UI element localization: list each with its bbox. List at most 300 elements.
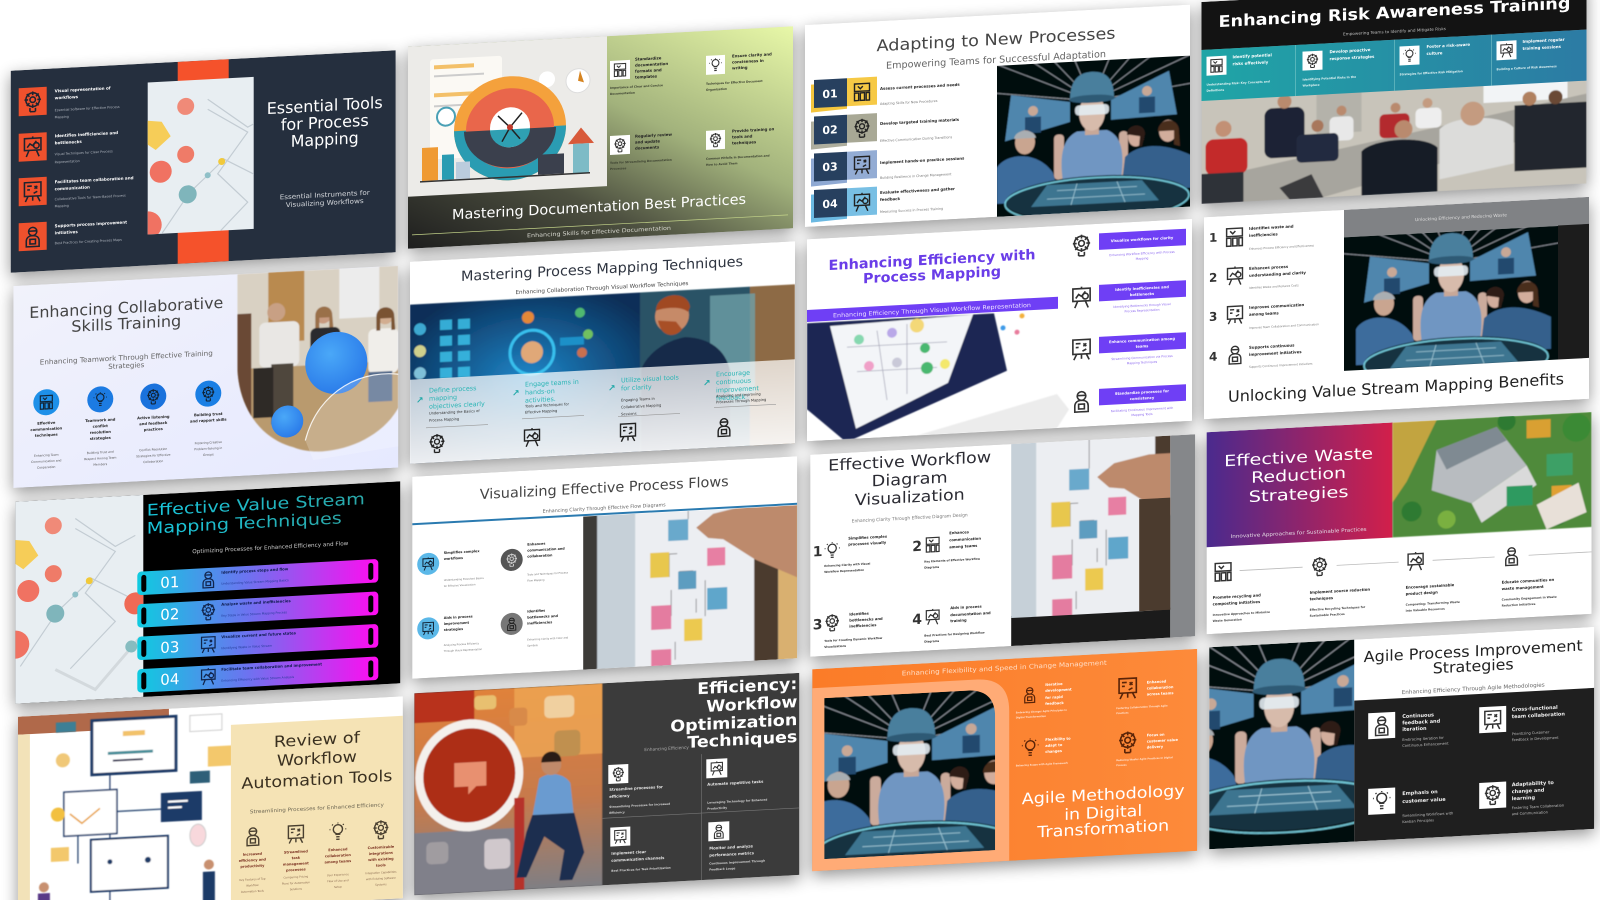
benefit labels: Enhance communication among [1109,337,1175,344]
step labels: Develop targeted training materials [880,117,960,126]
strategy labels [1402,704,1565,808]
risk labels: culture [1426,50,1443,56]
skill notes: Communication and [31,458,62,464]
benefit notes: Supports Continuous Improvement Initiatives [1249,362,1313,369]
subtitle: Enhancing Clarity Through Effective Flow Diagrams [543,502,666,515]
item notes: Tools for Creating Dynamic Workflow [824,636,883,643]
strategy notes: Feedback in Development [1512,736,1559,742]
arrows and icons [416,375,776,454]
item descriptions: Essential Software for Effective Process [55,105,120,112]
title: Agile Methodology [1022,782,1185,808]
feature notes: Plans for Automation [282,880,310,886]
task labels: Automate repetitive tasks [707,779,764,787]
benefit notes: Enhances Process Efficiency and Effectiveness [1249,243,1315,251]
process map image [148,76,254,234]
skill labels: communication [30,426,63,432]
practice labels: Ensure clarity and [732,51,772,59]
step notes: Analyzing and Improving [716,392,761,398]
task notes: Best Practices for Task Prioritization [611,866,671,873]
beige title panel [231,716,403,900]
step labels: Assess current processes and needs [880,82,960,91]
step labels: Facilitate team collaboration and improvement [221,661,322,672]
flow labels: inefficiencies [527,620,552,626]
item numbers: 2 [912,539,922,555]
panel: Effective Waste Reduction Strategies [1207,408,1592,634]
subtitle: Streamlining Processes for Enhanced Efficiency [250,802,384,815]
strategy notes: Sustainable Practices [1310,612,1345,618]
sticky notes photo [1011,436,1170,618]
item numbers [813,539,922,634]
benefit numbers [1209,231,1217,364]
title [1224,444,1373,507]
risk labels: risks effectively [1232,59,1269,66]
title [1364,637,1583,681]
strategy labels: learning [1512,795,1535,802]
title: Visualization [855,486,965,509]
practice notes: How to Avoid Them [706,161,738,167]
risk notes: Building a Culture of Risk Awareness [1496,64,1557,71]
subtitle: Optimizing Processes for Enhanced Efficiency and Flow [192,541,349,555]
title: Workflow [277,748,357,770]
practice notes: Organization [706,87,727,92]
benefit labels: Visualize workflows for clarity [1111,236,1174,243]
strategy notes: Fostering Team Collaboration [1512,803,1564,810]
feature labels: processes [286,867,306,872]
strategy labels: product design [1406,590,1438,596]
benefit labels: Identify inefficiencies and [1115,285,1169,292]
step notes: Identifying Waste in Value Stream [221,644,272,650]
skill labels: Teamwork and [85,418,116,423]
feature labels: integrations [369,851,393,856]
agile labels: adapt to [1045,743,1063,748]
item labels: Supports process improvement [55,220,127,228]
step notes: Effective Mapping [525,409,557,415]
task labels: Implement clear [611,849,646,856]
benefit labels [1249,223,1306,357]
strategy notes [1402,729,1564,824]
strategy notes: and Communication [1512,810,1548,816]
item labels: bottlenecks [55,139,82,145]
benefit notes: Enhancing Workflow Efficiency with Process [1109,250,1175,257]
practice notes: Techniques for Effective Document [706,79,763,86]
risk labels [1232,37,1565,66]
step notes: Measuring Success in Process Training [880,207,943,214]
title: Strategies [1249,483,1349,506]
panel: Agile Methodology in Digital Transformation [764,649,1197,900]
risk notes: Strategies for Effective Risk Mitigation [1400,69,1463,77]
panel: Mastering Process Mapping Techniques [410,241,795,464]
numbered badges: 04 [822,197,838,211]
agile labels: development [1045,688,1072,693]
subtitle: Strategies [108,361,145,371]
step headings: Encourage [716,369,750,378]
benefit numbers: 3 [1209,310,1217,324]
practice labels: conciseness in [732,58,764,65]
numbered badges: 02 [822,123,838,137]
flow labels: workflows [444,556,463,561]
item numbers: 1 [813,544,822,561]
title: Enhancing Efficiency with [829,247,1035,274]
title: Efficiency: [697,674,797,698]
arrows and icons: ↗ [608,384,616,394]
item labels: processes visually [848,541,887,547]
item labels [55,84,134,235]
step headings: improvement [716,384,759,394]
agile labels: feedback [1045,701,1064,706]
purple subtitle band: Enhancing Efficiency Through Visual Workflow Representation [833,303,1031,319]
step notes: Understanding the Basics of [429,409,480,416]
task labels: Streamline processes for [609,784,663,792]
skill labels: Effective [37,421,56,426]
task notes [609,797,767,877]
arrows and icons: ↗ [703,379,711,389]
title [828,247,1036,289]
subtitle: Innovative Approaches for Sustainable Practices [1231,527,1367,540]
icons column [19,87,47,251]
teal band [1202,30,1586,101]
strategy labels: change and [1512,788,1545,795]
item descriptions: Visual Techniques for Clear Process [55,149,113,156]
skill notes: Conflict Resolution [139,447,167,452]
feature notes: Integration Capabilities [365,870,397,875]
item labels: documentation and [950,611,991,617]
agile notes: Reducing Waste: Agile Practices in Digital [1116,756,1173,762]
benefit notes: Mapping Techniques [1127,360,1158,365]
step notes: Sessions [621,412,637,417]
benefit labels: inefficiencies [1249,231,1278,238]
practice labels: Provide training on [732,126,774,134]
item labels: training [950,618,967,623]
title [268,96,382,149]
benefit labels: Standardize processes for [1115,389,1169,396]
skill labels: and feedback [139,421,168,426]
skill labels: Building trust [194,412,223,417]
subtitle: Enhancing Flexibility and Speed in Change Management [902,659,1107,678]
risk labels: response strategies [1330,54,1375,61]
title [241,727,392,793]
strategy notes: Embracing Iteration for [1402,736,1444,742]
title: Optimization [670,710,797,736]
subtitle: Enhancing Skills for Effective Documentation [527,226,672,239]
step headings: continuous [716,377,752,386]
title: in Digital [1064,802,1142,824]
subtitle: Enhancing Teamwork Through Effective Training [40,349,213,367]
practice labels: Standardize [635,55,662,62]
flow notes: Symbols [527,643,539,648]
futuristic team image [1209,640,1354,850]
flow labels: Identifies [527,609,545,614]
futuristic team image [1344,226,1558,371]
benefit notes [1249,243,1319,369]
practice labels: techniques [732,139,757,146]
step headings [429,368,759,418]
strategy notes: Effective Recycling Techniques for [1310,605,1366,612]
item descriptions: Mapping [55,115,69,119]
step bars: 03 [160,638,179,657]
item icons [825,537,939,631]
futuristic team image [764,660,1080,900]
title: Essential Tools [267,93,383,118]
item labels: communication [55,184,90,191]
risk notes: Workplace [1302,83,1320,88]
strategy labels: waste management [1502,584,1544,591]
step notes: Building Resilience in Change Management [880,172,952,180]
strategy labels: Emphasis on [1402,789,1438,797]
title: Effective Workflow [828,448,992,475]
mosaic and reader image [414,683,602,895]
benefit numbers: 2 [1209,271,1217,285]
title: Mastering Process Mapping Techniques [461,254,743,285]
strategy notes: Reduction Initiatives [1502,602,1536,608]
skill notes: Members [93,462,108,467]
panel: Enhancing Risk Awareness Training [1202,0,1586,204]
skill notes: Groups [203,452,214,457]
benefit notes: Mapping [1136,256,1149,261]
benefit notes: Facilitating Continuous Improvement with [1111,406,1173,413]
risk notes: Understanding Risk: Key Concepts and [1206,79,1270,87]
numbered badges [811,77,877,223]
strategy labels: Implement source reduction [1310,587,1370,595]
feature labels: tools [376,863,386,868]
item descriptions: Collaborative Tools for Team-Based Process [55,194,126,201]
agile labels: changes [1045,749,1062,754]
step labels: Identify process steps and flow [221,566,289,575]
item labels: bottlenecks and [849,617,883,623]
task icons [602,749,799,885]
title: Automation Tools [241,767,392,793]
panel: Essential Tools for Process Mapping [10,50,396,273]
risk labels: Identify potential [1232,52,1272,59]
flow notes: Analyzing Process Efficiency [444,641,479,647]
subtitle [280,190,370,207]
benefit labels: Enhances process [1249,264,1289,271]
skill labels: and rapport skills [190,418,227,424]
step notes: Understanding Value Stream Mapping Basics [221,578,289,586]
skill notes: Building Trust and [87,450,114,455]
round icons [417,548,523,640]
item notes: Visualizations [824,644,846,649]
step labels: Analyze waste and inefficiencies [221,598,291,607]
title: Mapping Techniques [147,508,342,538]
feature notes: Automation Tools [241,889,265,894]
strategy notes: Continuous Enhancement [1402,742,1449,748]
step labels: Evaluate effectiveness and gather [880,186,955,195]
subtitle: Enhancing Collaboration Through Visual Workflow Techniques [516,281,689,296]
skill notes: Fostering Creative [195,440,222,445]
step notes: Adapting Skills for New Procedures [880,99,938,106]
task notes: Feedback Loops [709,866,736,872]
practice labels: formats and [635,67,662,74]
skill notes: Collaboration [143,459,163,464]
benefit labels: Identifies waste and [1249,224,1294,231]
step notes [221,578,294,683]
title: Effective Waste [1224,444,1373,470]
feature labels: efficiency and [239,858,267,863]
title: Agile Process Improvement [1364,637,1583,666]
benefit notes [1109,250,1175,418]
skill notes: Cooperation [37,465,56,470]
step notes: Effective Communication During Transitions [880,135,952,143]
agile labels: Iterative [1045,682,1063,687]
group training photo [236,266,398,452]
arrows and icons: ↗ [416,396,424,406]
agile labels: Enhanced [1147,680,1167,685]
practice labels [635,49,774,151]
flow labels: bottlenecks and [527,614,559,620]
agile labels: Focus on [1147,733,1165,738]
agile labels: customer value [1147,738,1178,744]
flow labels: collaboration [527,553,553,559]
translucent overlay [410,359,795,464]
item labels: Enhances [949,530,970,535]
task labels: performance metrics [709,850,755,858]
feature notes: Solutions [290,887,303,891]
panel: Effective Value Stream Mapping Techniques [1,471,400,722]
item numbers: 3 [813,617,822,634]
strategy notes: Community Engagement in Waste [1502,595,1557,602]
task notes: Streamlining Processes for Increased [609,802,670,809]
step labels [221,564,322,672]
item labels: inefficiencies [849,623,877,629]
strategy labels: Educate communities on [1502,577,1554,585]
item labels: Identifies inefficiencies and [55,130,118,138]
strategy notes: Innovative Approaches to Minimize [1213,610,1270,617]
agile notes: Fostering Collaboration Through Agile [1116,704,1168,710]
feature labels: Increased [243,852,263,857]
agile notes: Embracing Change: Agile Principles in [1016,709,1067,715]
skill labels: practices [144,427,164,432]
title [30,297,222,332]
strategy labels: techniques [1310,595,1334,601]
item descriptions: Representation [55,159,80,164]
step notes [429,391,766,427]
title: Visualizing Effective Process Flows [480,474,729,503]
flow notes: Enhancing Clarity with Color and [527,635,569,642]
item labels: Identifies [849,612,870,617]
agile labels: Flexibility to [1045,737,1071,742]
strategy labels: composting initiatives [1213,599,1261,606]
title: Effective Value Stream [147,489,365,520]
feature labels: management [283,861,309,867]
subtitle: Enhancing Efficiency [644,745,689,753]
practice labels: documents [635,144,660,151]
practice labels: templates [635,73,658,80]
automation illustration [38,713,232,900]
strategy icons [1368,706,1506,815]
strategy labels: Continuous [1402,712,1434,720]
step notes: Key Steps in Value Stream Mapping Process [221,610,287,618]
skill labels [30,412,226,440]
title: Reduction [1251,464,1346,487]
title: Adapting to New Processes [877,24,1115,55]
task notes: Leveraging Technology for Enhanced [707,798,767,805]
step headings: mapping [429,393,457,403]
panel: Unlocking Value Stream Mapping Benefits [1204,189,1600,425]
item notes: Key Elements of Effective Workflow [924,557,980,564]
dashboard and analyst image [410,284,795,464]
risk icons [1206,33,1516,101]
benefit notes: Identifies Waste and Reduces Costs [1249,283,1299,290]
step labels [880,82,965,202]
flow notes: Tools and Techniques for Process [527,570,569,577]
skill labels: conflict [93,424,108,429]
benefit notes: Process Representation [1124,308,1160,313]
timeline icons [1215,543,1592,581]
risk notes: Definitions [1206,88,1224,93]
benefit notes: Improves Team Collaboration and Communication [1249,322,1319,330]
benefit notes: Mapping Tools [1131,412,1153,417]
title [828,448,992,511]
strategy notes: Kanban Principles [1402,818,1434,824]
title [670,674,798,753]
item notes: Enhancing Clarity with Visual [824,562,870,568]
flow labels: strategies [444,627,463,632]
risk labels: training sessions [1522,44,1562,51]
title: Strategies [1433,655,1514,677]
item labels: Facilitates team collaboration and [55,175,134,184]
numbered badges: 01 [822,87,838,101]
benefit labels: Supports continuous [1249,342,1295,350]
strategy notes: into Valuable Resources [1406,607,1445,613]
flow labels: Enhances [527,542,545,547]
practice notes: Processes [610,166,627,171]
strategy labels: feedback and [1402,719,1441,727]
item notes: Best Practices for Designing Workflow [924,630,985,638]
strategy notes: Streamlining Workflows with [1402,811,1453,818]
isometric waste facility image [1393,408,1592,537]
practice labels: and update [635,138,660,145]
skill notes: Respect Among Team [84,456,117,461]
benefit icons [1073,234,1090,412]
task notes: Continuous Improvement Through [709,859,765,866]
skill labels: Active listening [137,415,170,420]
panel: Enhancing Efficiency with Process Mapping [807,219,1192,441]
task notes: Productivity [707,806,727,811]
panel: Visualizing Effective Process Flows [412,455,813,726]
strategy labels [1213,577,1554,606]
doc icons [610,55,725,155]
subtitle: Enhancing Clarity Through Effective Diagram Design [852,512,968,524]
item labels: Aids in process [950,605,982,610]
subtitle: Essential Instruments for [280,189,370,201]
strategy labels: iteration [1402,726,1427,733]
item labels: among teams [949,544,978,549]
benefit numbers: 1 [1209,231,1217,245]
feature notes: Comparing Pricing [284,874,309,880]
strategy labels: Cross-functional [1512,705,1558,713]
feature labels: Enhanced [328,847,348,852]
strategy notes [1213,595,1557,623]
agile labels: for rapid [1045,695,1063,700]
title [1022,782,1185,842]
title: Unlocking Value Stream Mapping Benefits [1228,370,1564,406]
feature icons [247,820,388,846]
practice labels: tools and [732,133,753,140]
benefit labels: understanding and clarity [1249,270,1306,278]
title: for Process [281,111,369,134]
feature labels: task [292,856,301,860]
practice notes: Documentation [610,91,635,96]
benefit labels: consistency [1130,396,1155,401]
benefit labels: improvement initiatives [1249,349,1302,357]
task notes: Efficiency [609,810,625,815]
step notes: Processes Through Mapping [716,398,766,404]
step notes: Engaging Teams in [621,397,655,403]
item descriptions: Mapping [55,204,69,208]
item descriptions: Best Practices for Creating Process Maps [55,238,122,245]
skill notes [31,440,222,470]
blue circles [271,332,398,452]
